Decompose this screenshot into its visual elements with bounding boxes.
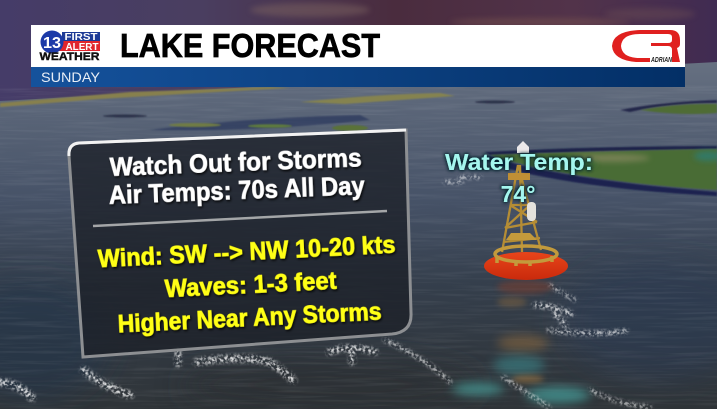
buoy top platform [508, 173, 530, 180]
text: wind: Wind: SW --> NW 10-20 kts [97, 231, 396, 273]
whitecaps on the water [0, 177, 650, 407]
heading: air temperatures: Air Temps: 70s All Day [108, 170, 366, 210]
label: water temperature [445, 149, 593, 207]
logo: 13 First Alert Weather: FIRST [64, 32, 98, 43]
buoy hull [484, 252, 568, 280]
divider [93, 211, 387, 226]
header white bar [31, 25, 685, 67]
land: distant shoreline and islands [0, 87, 717, 196]
logo: CR Adrian [612, 30, 680, 64]
subheading: day: SUNDAY [41, 69, 101, 85]
icon: buoy [484, 141, 568, 294]
heading: storm watch: Watch Out for Storms [109, 142, 362, 182]
header banner [31, 25, 685, 87]
label: water temperature: Water Temp: [445, 149, 593, 175]
title: LAKE FORECAST [120, 27, 380, 64]
logo: 13 First Alert Weather: ALERT [66, 42, 98, 53]
buoy reflection [497, 280, 553, 294]
buoy lattice tower [502, 165, 541, 252]
header blue bar [31, 67, 685, 87]
logo: 13 First Alert Weather: 13 [43, 35, 61, 52]
logo: 13 First Alert Weather [40, 30, 100, 63]
label: water temperature: 74° [501, 181, 535, 207]
buoy guard ring [495, 246, 557, 266]
panel background and frame [69, 130, 411, 357]
buoy light housing [517, 141, 529, 153]
panel top highlight [69, 130, 406, 156]
logo: CR Adrian: ADRIAN [650, 57, 673, 64]
buoy deck [506, 233, 537, 240]
text: storm waves: Higher Near Any Storms [117, 298, 382, 338]
text: waves: Waves: 1-3 feet [164, 267, 338, 303]
background: sky [0, 0, 717, 110]
buoy side cylinder [527, 202, 536, 221]
logo: 13 First Alert Weather: WEATHER [40, 51, 100, 63]
panel: forecast card [69, 130, 411, 357]
